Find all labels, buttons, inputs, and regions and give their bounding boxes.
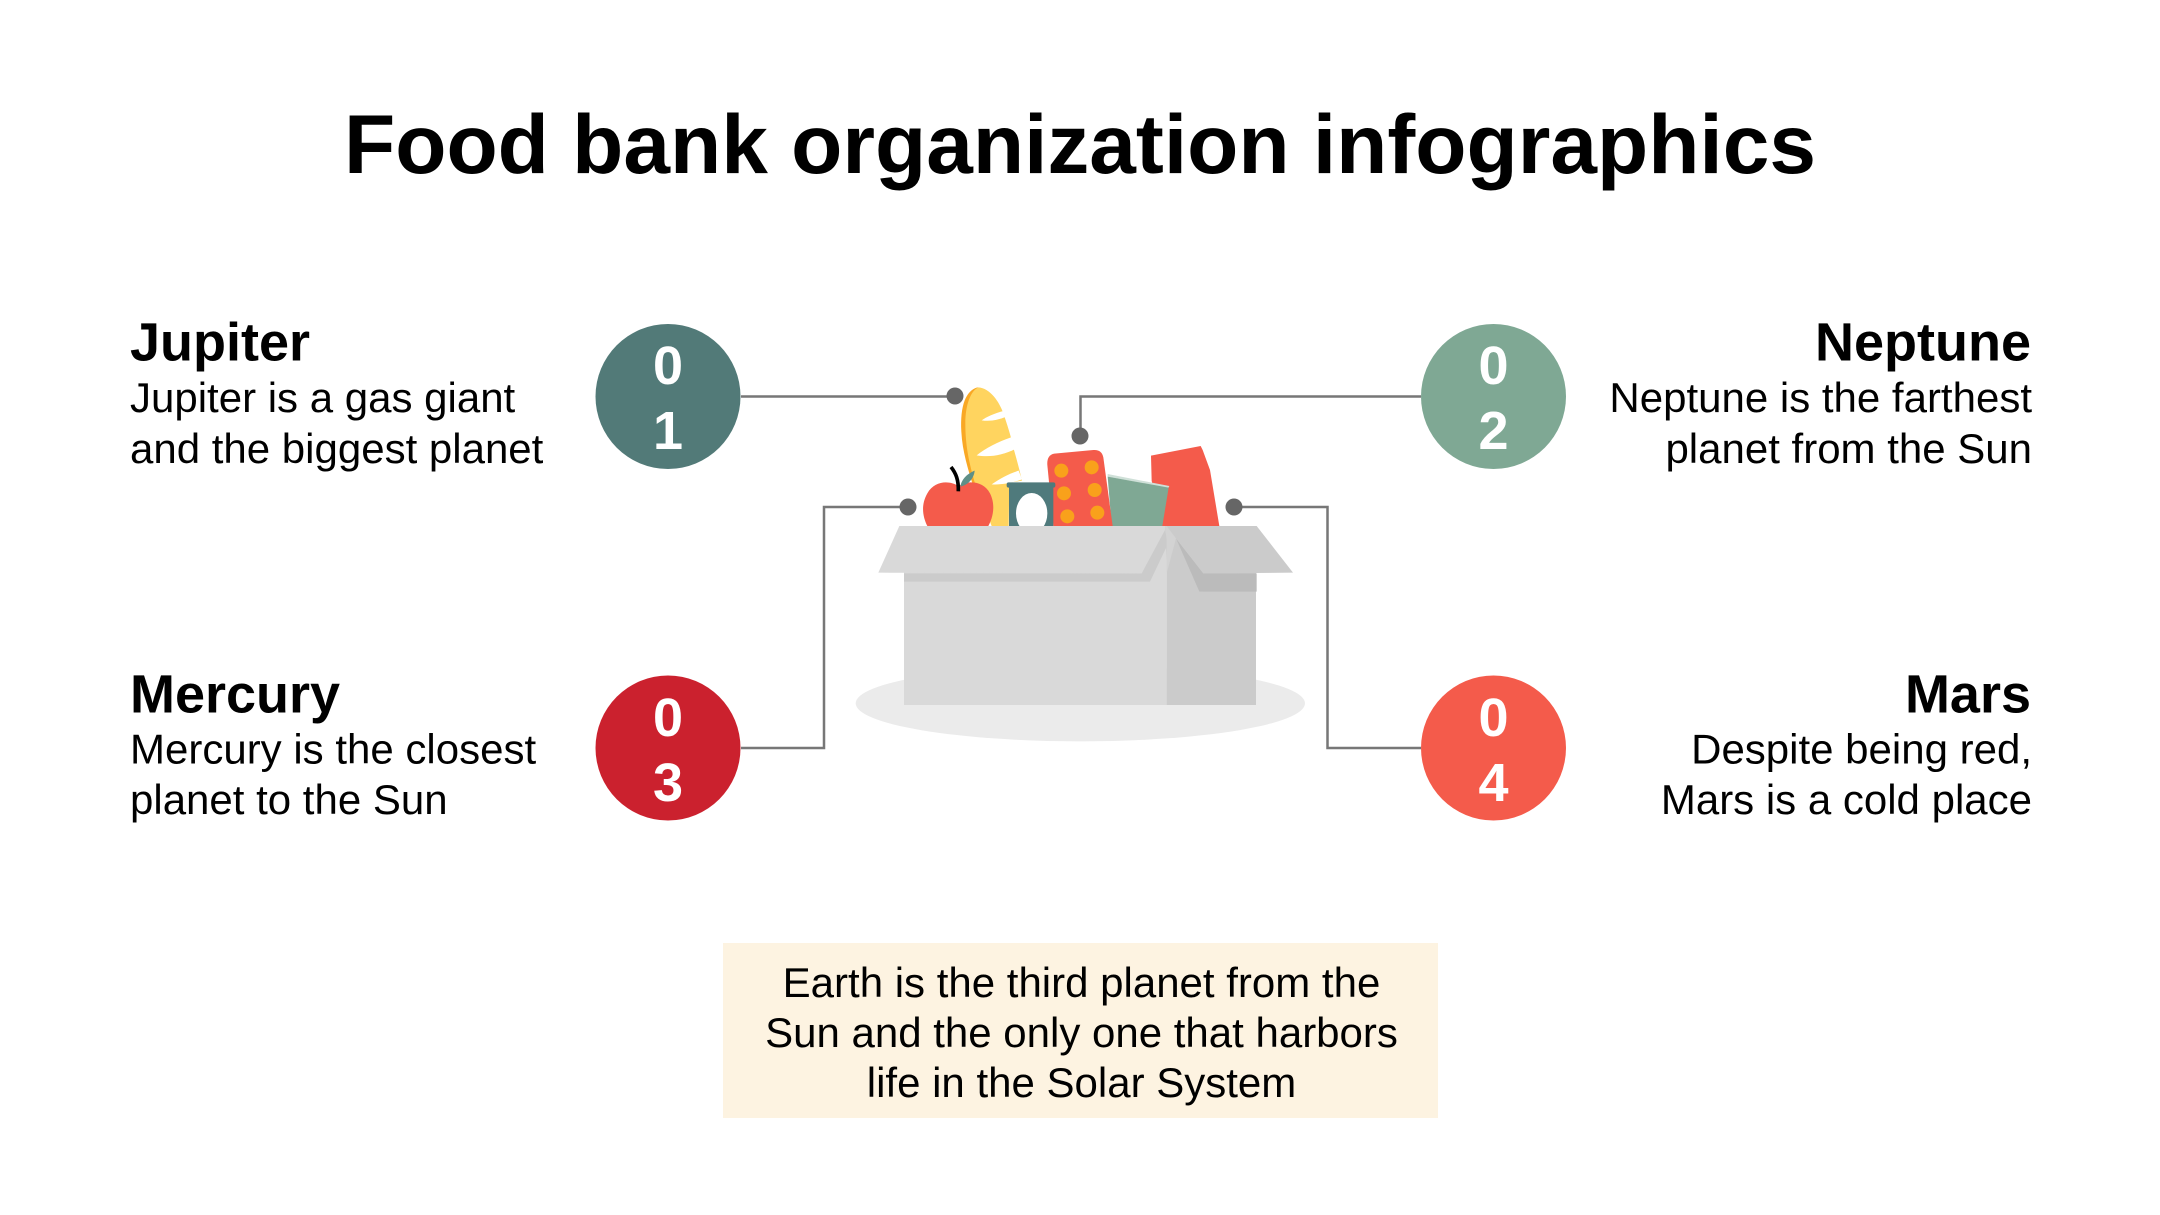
text block: Mercury: Mercury <box>130 664 340 724</box>
text block: Jupiter: and the biggest planet <box>130 425 544 472</box>
text block: Neptune: Neptune <box>1815 312 2031 372</box>
icon: bag <box>1151 446 1219 526</box>
icon: pill pack <box>1047 450 1113 526</box>
text block: Jupiter: Jupiter <box>130 312 310 372</box>
icon: apple <box>923 467 993 526</box>
callout: Earth: Earth is the third planet from the <box>783 959 1380 1006</box>
text block: Jupiter <box>130 312 544 472</box>
connector 04 <box>1226 498 1421 748</box>
text block: Neptune: planet from the Sun <box>1665 425 2032 472</box>
badge 03 <box>596 676 740 820</box>
text block: Mercury: planet to the Sun <box>130 776 448 823</box>
text block: Mars: Despite being red, <box>1691 726 2032 772</box>
illustration: food box <box>856 387 1305 741</box>
box <box>878 526 1293 705</box>
text block: Mars: Mars <box>1905 664 2031 724</box>
text block: Mercury <box>130 664 536 823</box>
badge 01: 1 <box>653 401 683 461</box>
connector 01 <box>741 388 964 404</box>
badge 04: 4 <box>1478 753 1509 813</box>
connector 02 <box>1072 396 1421 444</box>
badge 04: 0 <box>1478 688 1509 748</box>
text block: Mars <box>1661 664 2032 823</box>
icon: can <box>1007 482 1055 534</box>
badge 03: 0 <box>653 688 683 748</box>
badge 02: 2 <box>1478 401 1509 461</box>
text block: Jupiter: Jupiter is a gas giant <box>130 374 516 421</box>
text block: Neptune <box>1609 312 2032 472</box>
badge 02: 0 <box>1478 336 1509 396</box>
callout: Earth: Sun and the only one that harbors <box>765 1009 1398 1056</box>
callout: Earth: life in the Solar System <box>867 1059 1296 1106</box>
icon: book <box>1108 474 1169 526</box>
text block: Neptune: Neptune is the farthest <box>1609 374 2032 421</box>
text block: Mars: Mars is a cold place <box>1661 776 2032 823</box>
connector 03 <box>741 498 916 748</box>
badge 03: 3 <box>653 753 683 813</box>
ground shadow <box>856 665 1305 741</box>
text block: Mercury: Mercury is the closest <box>130 726 536 772</box>
title: Food bank organization infographics <box>344 97 1816 191</box>
callout: Earth <box>723 943 1438 1118</box>
badge 04 <box>1421 676 1566 820</box>
icon: bread <box>961 387 1022 526</box>
badge 02 <box>1421 324 1566 469</box>
badge 01: 0 <box>653 336 683 396</box>
badge 01 <box>596 324 740 469</box>
